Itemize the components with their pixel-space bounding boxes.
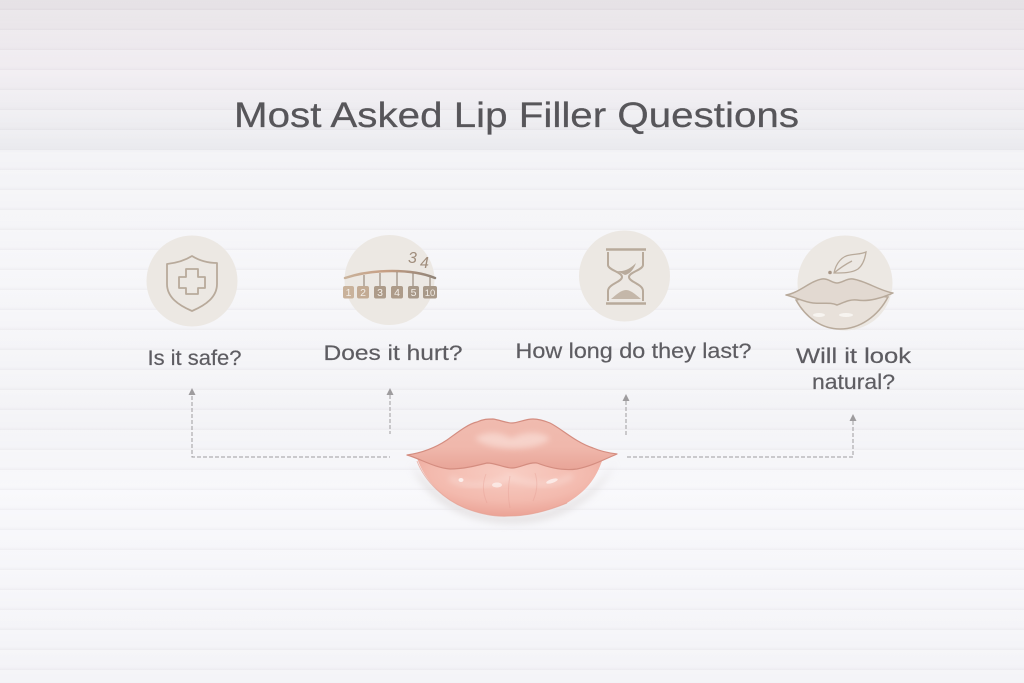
panel: is it safe	[146, 236, 242, 370]
label: How long do they last?	[516, 340, 752, 363]
lower lip	[417, 450, 603, 516]
connector: safe arrow	[188, 388, 390, 457]
icon: pain scale: 10	[425, 288, 435, 299]
upper lip	[407, 419, 617, 470]
label: Is it safe?	[148, 347, 242, 370]
panel: does it hurt	[324, 235, 462, 365]
icon: pain scale: 4	[394, 287, 400, 299]
label	[796, 345, 912, 394]
icon: pain scale: 4	[420, 255, 429, 272]
icon: hourglass	[579, 230, 670, 322]
illustration: lips	[407, 419, 617, 523]
label: natural?	[812, 371, 895, 394]
icon: pain scale	[343, 235, 437, 325]
connector: hurt arrow	[386, 388, 394, 434]
label: Will it look	[796, 345, 912, 368]
icon: pain scale: 1	[346, 287, 352, 299]
icon: pain scale: 3	[377, 287, 383, 299]
icon: pain scale: 3	[408, 250, 417, 267]
panel: how long	[516, 230, 752, 363]
icon: lips with leaf	[786, 236, 893, 330]
title: Most Asked Lip Filler Questions	[234, 96, 799, 135]
connector: last arrow	[622, 394, 630, 436]
panel: will it look natural	[786, 236, 912, 394]
icon: shield with cross	[146, 236, 238, 326]
icon: pain scale: 2	[360, 287, 366, 299]
label: Does it hurt?	[324, 342, 462, 365]
connector: natural arrow	[626, 414, 856, 457]
icon: pain scale: 5	[411, 287, 417, 299]
